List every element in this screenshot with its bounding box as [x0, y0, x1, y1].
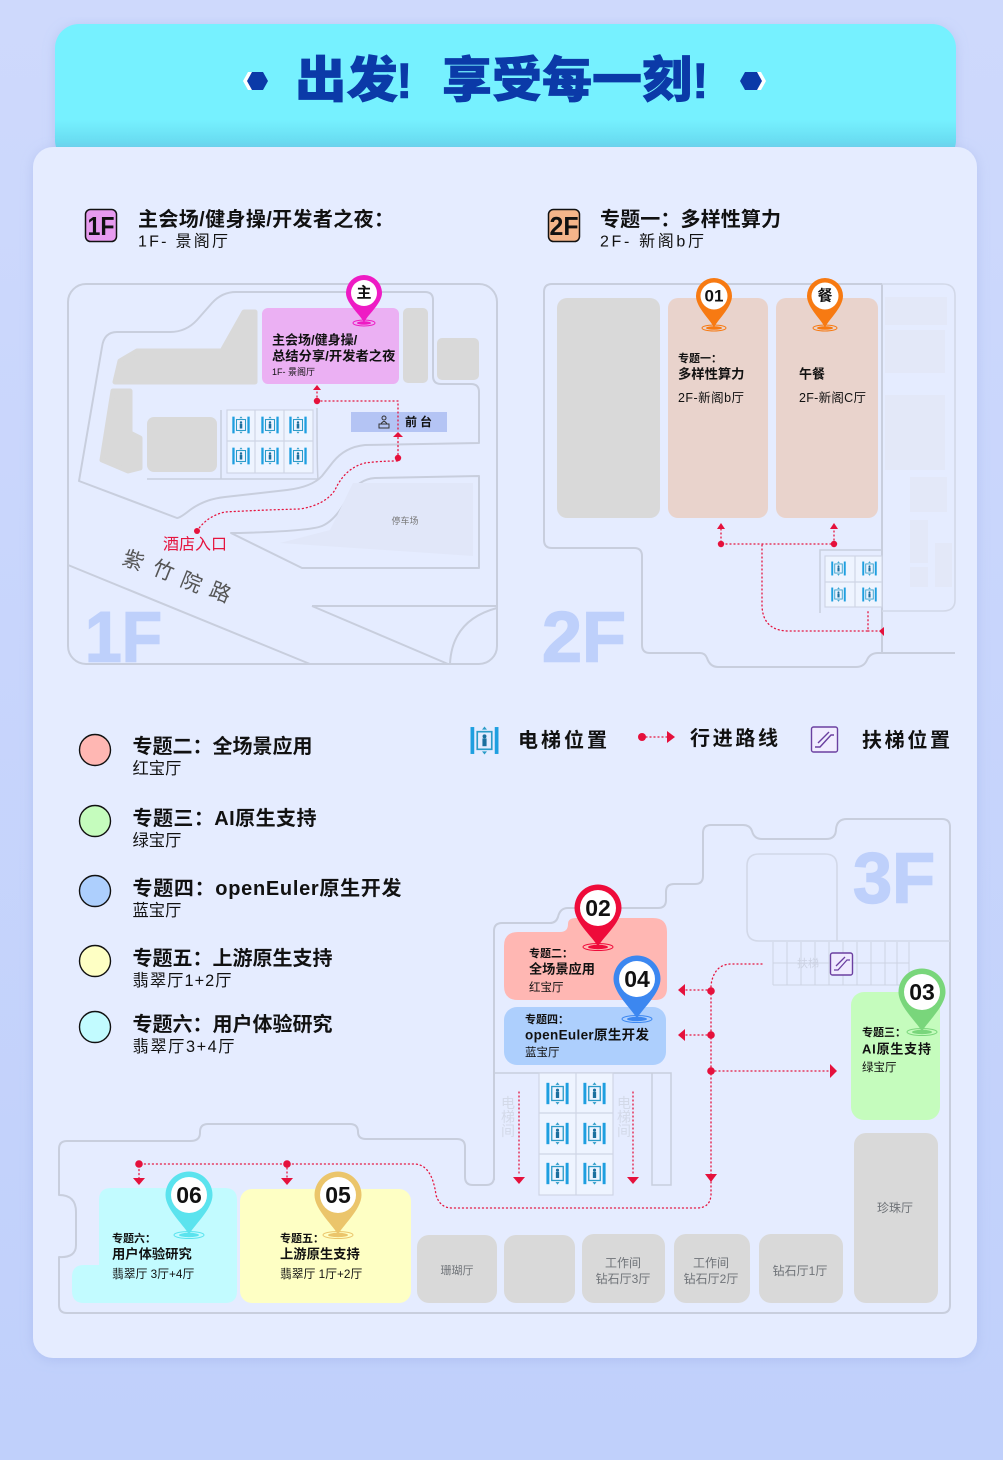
room: red hall: 红宝厅	[529, 980, 564, 994]
elevators	[147, 408, 318, 479]
icon: left hexagon ornament	[243, 72, 268, 90]
entrance label: 酒店入口	[163, 536, 227, 554]
1F badge: 1F	[88, 211, 114, 241]
2F watermark: 2F	[542, 599, 626, 678]
main card	[33, 147, 977, 1358]
room: 2F hall b: 专题一：	[678, 351, 722, 365]
room: yellow hall	[240, 1189, 411, 1303]
front desk: 前台	[405, 414, 435, 429]
front desk	[351, 412, 447, 432]
room: main hall: 总结分享/开发者之夜	[272, 348, 395, 364]
title text: 享受每一刻	[442, 54, 692, 108]
electrical room labels: 梯	[501, 1109, 515, 1125]
pin: 05: 05	[325, 1182, 351, 1208]
title text: !	[396, 53, 413, 109]
room: 2F hall b: 多样性算力	[678, 366, 744, 382]
legend item: theme 5	[80, 946, 332, 990]
room: cyan hall: 专题六：	[112, 1231, 156, 1245]
road label	[119, 546, 234, 608]
2F heading title: 专题一：多样性算力	[600, 208, 781, 231]
pin: 01: 01	[705, 286, 723, 306]
grey rooms: 钻石厅2厅	[684, 1271, 738, 1286]
elevator key: 电梯位置	[518, 728, 607, 752]
room: cyan hall: 用户体验研究	[112, 1246, 192, 1262]
pin: main	[346, 275, 382, 326]
room: 2F hall C: 2F-新阁C厅	[799, 390, 866, 405]
2F badge: 2F	[550, 211, 578, 241]
grey rooms: 珍珠厅	[877, 1201, 913, 1215]
road label: 竹	[149, 556, 177, 586]
road label: 紫	[119, 546, 147, 576]
theme legend	[80, 734, 402, 1056]
legend item: theme 2: 红宝厅	[132, 760, 181, 778]
room: blue hall	[504, 1007, 666, 1065]
pin: 05	[314, 1171, 362, 1238]
elevators	[539, 1073, 613, 1195]
room: main hall: 1F- 景阁厅	[272, 366, 315, 377]
pin: 03	[898, 968, 946, 1036]
1F heading subtitle: 1F- 景阁厅	[138, 233, 228, 251]
grey rooms: 钻石厅3厅	[596, 1271, 650, 1286]
grey rooms: 钻石厅1厅	[773, 1263, 827, 1278]
room: yellow hall: 专题五：	[280, 1231, 324, 1245]
room: blue hall: openEuler原生开发	[525, 1027, 650, 1043]
title text: !	[692, 53, 709, 109]
pin: 06: 06	[176, 1182, 202, 1208]
route	[717, 523, 884, 636]
escalator	[773, 942, 909, 985]
pin: 06	[166, 1171, 212, 1238]
room: green hall: 专题三：	[862, 1025, 906, 1039]
parking label: 停车场	[391, 515, 419, 526]
room: green hall: 绿宝厅	[862, 1060, 896, 1074]
legend item: theme 6	[80, 1012, 332, 1056]
escalator: 扶梯	[797, 956, 819, 970]
panel: 2F map	[542, 278, 955, 678]
title text	[295, 53, 709, 109]
room: yellow hall: 翡翠厅 1厅+2厅	[280, 1267, 362, 1281]
2F heading	[548, 208, 781, 251]
room: 2F hall C: 午餐	[799, 367, 825, 382]
pin: 04	[614, 955, 660, 1022]
panel: 1F map	[68, 275, 497, 678]
grey rooms	[417, 1133, 938, 1303]
grey rooms: 工作间	[693, 1256, 729, 1270]
room: cyan hall: 翡翠厅 3厅+4厅	[112, 1267, 194, 1281]
3F watermark: 3F	[853, 840, 935, 919]
legend item: theme 3	[80, 806, 316, 850]
electrical room labels: 电	[617, 1095, 631, 1111]
grey rooms: 工作间	[605, 1256, 641, 1270]
grey rooms: 珊瑚厅	[440, 1264, 474, 1277]
route key: 行进路线	[690, 727, 778, 750]
elevator key	[471, 727, 607, 754]
legend item: theme 5: 翡翠厅1+2厅	[132, 972, 232, 990]
road label: 路	[206, 578, 234, 608]
escalator key	[812, 727, 950, 752]
route	[194, 385, 403, 534]
legend item: theme 2: 专题二：全场景应用	[132, 734, 312, 758]
electrical room labels	[501, 1095, 631, 1139]
room: red hall: 专题二：	[529, 946, 573, 960]
legend item: theme 6: 专题六：用户体验研究	[132, 1012, 332, 1036]
pin: lunch	[807, 278, 843, 331]
escalator key: 扶梯位置	[862, 728, 950, 752]
legend item: theme 3: 绿宝厅	[132, 832, 181, 850]
legend item: theme 2	[80, 734, 312, 778]
room: green hall: AI原生支持	[862, 1042, 931, 1057]
room: 2F hall b: 2F-新阁b厅	[678, 390, 744, 405]
road label: 院	[177, 568, 205, 598]
title text: 出发	[295, 54, 398, 108]
icon: right hexagon ornament	[740, 72, 766, 90]
electrical room labels: 间	[617, 1123, 631, 1139]
route	[133, 964, 837, 1208]
1F heading title: 主会场/健身操/开发者之夜：	[138, 207, 394, 231]
elevators	[820, 550, 882, 613]
1F heading	[86, 207, 394, 251]
electrical room labels: 间	[501, 1123, 515, 1139]
legend item: theme 6: 翡翠厅3+4厅	[132, 1038, 234, 1056]
room: 2F hall C	[776, 298, 878, 518]
room: red hall	[504, 918, 667, 1000]
electrical room labels: 电	[501, 1095, 515, 1111]
room: 2F hall b	[668, 298, 768, 518]
room: main hall	[262, 308, 399, 384]
pin: 04: 04	[624, 966, 650, 992]
title banner	[55, 24, 956, 164]
pin: 03: 03	[909, 979, 935, 1005]
legend item: theme 3: 专题三：AI原生支持	[132, 807, 316, 830]
pin: lunch: 餐	[817, 286, 833, 304]
route key	[638, 727, 778, 750]
room: red hall: 全场景应用	[529, 961, 595, 977]
legend item: theme 4: 蓝宝厅	[132, 902, 181, 920]
legend item: theme 4	[80, 876, 402, 920]
symbol legend	[471, 727, 950, 754]
1F watermark: 1F	[85, 599, 162, 678]
pin: 02: 02	[585, 895, 611, 921]
room: yellow hall: 上游原生支持	[280, 1246, 360, 1262]
panel: 3F map	[59, 819, 950, 1313]
room: cyan hall	[72, 1188, 237, 1303]
icon: escalator	[830, 953, 852, 975]
room: main hall: 主会场/健身操/	[272, 333, 358, 348]
room: blue hall: 蓝宝厅	[525, 1045, 560, 1059]
room: blue hall: 专题四：	[525, 1012, 569, 1026]
room: green hall	[851, 992, 940, 1120]
pin: 02	[574, 884, 622, 950]
legend item: theme 4: 专题四：openEuler原生开发	[132, 877, 402, 900]
2F heading subtitle: 2F- 新阁b厅	[600, 233, 704, 251]
pin: 01	[696, 278, 732, 331]
legend item: theme 5: 专题五：上游原生支持	[132, 946, 332, 970]
pin: main: 主	[356, 284, 372, 302]
electrical room labels: 梯	[617, 1109, 631, 1125]
